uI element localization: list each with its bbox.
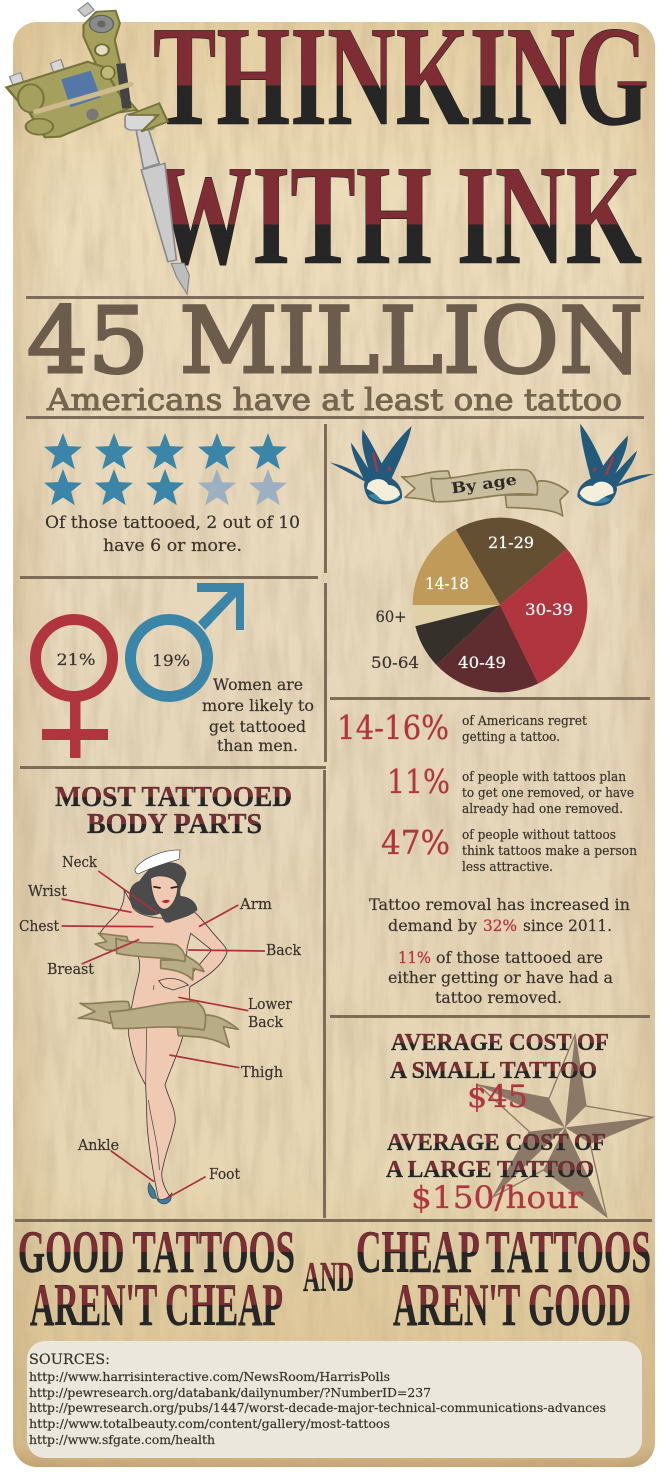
pie chart: tattooed by age: 50-64 — [371, 653, 419, 672]
panel: sources: http://www.harrisinteractive.com/NewsRoom/HarrisPolls — [29, 1370, 390, 1384]
stat: 47 percent: less attractive. — [462, 860, 553, 875]
stat: 47 percent: of people without tattoos — [462, 828, 616, 843]
heading: most tattooed body parts: BODY PARTS — [87, 808, 262, 840]
panel: most tattooed body parts — [19, 781, 301, 1204]
banner: by age: By age — [450, 470, 518, 498]
panel: sources: http://www.totalbeauty.com/content/gallery/most-tattoos — [29, 1417, 390, 1431]
panel: sources: http://pewresearch.org/pubs/1447/worst-decade-major-technical-communications-advances — [29, 1401, 606, 1415]
panel: regret statistics — [337, 708, 638, 1007]
body part labels: Back — [248, 1015, 283, 1031]
text: removal share: 11% — [398, 948, 431, 967]
top rule — [26, 296, 644, 299]
text: removal demand — [369, 895, 630, 935]
heading: small tattoo cost: AVERAGE COST OF — [391, 1030, 609, 1056]
male percent: 19% — [152, 651, 190, 670]
heading: small tattoo cost — [390, 1030, 609, 1084]
text: removal share — [388, 948, 613, 1007]
section rule — [26, 416, 644, 419]
pie chart: tattooed by age — [371, 518, 587, 692]
panel: tattoo cost — [386, 1030, 653, 1217]
stat: 47 percent: 47% — [381, 823, 450, 862]
stat: 14-16 percent: 14-16% — [337, 708, 449, 747]
pie chart: tattooed by age: 14-18 — [425, 574, 469, 593]
body part labels: Lower — [248, 997, 292, 1013]
gender caption: get tattooed — [209, 717, 306, 736]
body part labels: Back — [266, 943, 301, 959]
pie chart: tattooed by age: 40-49 — [458, 653, 506, 672]
female percent: 21% — [56, 650, 96, 669]
text: removal share: tattoo removed. — [435, 988, 562, 1007]
heading: large tattoo cost — [386, 1130, 606, 1183]
heading: large tattoo cost: A LARGE TATTOO — [386, 1157, 594, 1183]
text: removal share: either getting or have had a — [388, 968, 613, 987]
slogan: AREN'T CHEAP — [30, 1272, 283, 1338]
stat: 11 percent: of people with tattoos plan — [462, 770, 627, 785]
section dividers — [15, 424, 652, 1222]
body part labels: Arm — [239, 897, 272, 913]
icon: male symbol — [130, 583, 244, 696]
gender caption: Women are — [213, 675, 303, 694]
slogan: GOOD TATTOOS — [18, 1219, 295, 1285]
text: removal demand: since 2011. — [523, 916, 612, 935]
text: removal share: of those tattooed are — [436, 948, 603, 967]
panel: sources: SOURCES: — [29, 1352, 110, 1368]
gender caption: more likely to — [202, 696, 314, 715]
stat: 11 percent: 11% — [387, 762, 450, 801]
body part labels: Breast — [47, 962, 94, 978]
icon: right swallow — [567, 424, 661, 515]
panel: by age — [330, 424, 661, 692]
text: removal demand: Tattoo removal has increased in — [369, 895, 630, 914]
pie chart: tattooed by age: 60+ — [376, 607, 406, 626]
stars caption: Of those tattooed, 2 out of 10 — [45, 513, 300, 533]
gender caption: than men. — [217, 736, 298, 755]
banner: by age — [402, 470, 568, 516]
stat: 47 percent — [381, 823, 638, 875]
panel: sources: http://pewresearch.org/databank/dailynumber/?NumberID=237 — [29, 1386, 431, 1400]
icon: tattoo machine — [6, 3, 189, 294]
stat: 11 percent: to get one removed, or have — [462, 786, 634, 801]
body part labels: Thigh — [241, 1065, 283, 1081]
heading: most tattooed body parts — [55, 781, 292, 840]
panel: gender comparison — [36, 583, 314, 758]
heading: small tattoo cost: A SMALL TATTOO — [390, 1058, 597, 1084]
title — [153, 0, 649, 294]
panel: sources: http://www.sfgate.com/health — [29, 1433, 215, 1447]
body part labels: Ankle — [77, 1138, 119, 1154]
pie chart: tattooed by age: 30-39 — [525, 600, 573, 619]
subtitle: Americans have at least one tattoo — [46, 383, 622, 418]
heading: large tattoo cost: AVERAGE COST OF — [387, 1130, 606, 1156]
stars caption — [45, 513, 300, 556]
figure: sailor pin-up — [62, 850, 265, 1204]
text: removal demand: demand by — [388, 916, 477, 935]
gender caption — [202, 675, 314, 755]
body part labels: Foot — [209, 1167, 240, 1183]
stat: 47 percent: think tattoos make a person — [462, 844, 638, 859]
big number: 45 million: 45 MILLION — [27, 289, 643, 394]
body part labels — [19, 855, 301, 1183]
body part labels: Chest — [19, 919, 59, 935]
price: small tattoo: $45 — [467, 1079, 528, 1115]
stat: 14-16 percent: getting a tattoo. — [462, 730, 560, 745]
text: removal demand: 32% — [483, 916, 517, 935]
stars caption: have 6 or more. — [103, 536, 242, 556]
panel: sources — [27, 1341, 642, 1458]
panel: number of tattoos — [44, 433, 300, 556]
body part labels: Neck — [62, 855, 97, 871]
stat: 11 percent: already had one removed. — [462, 802, 623, 817]
icon: left swallow — [330, 426, 412, 504]
pie chart: tattooed by age: 21-29 — [488, 533, 534, 552]
heading: most tattooed body parts: MOST TATTOOED — [55, 781, 292, 813]
icon: nautical star — [478, 1035, 653, 1217]
icon: female symbol — [36, 620, 112, 758]
slogan — [18, 1219, 651, 1338]
price: large tattoo: $150/hour — [411, 1180, 583, 1216]
stat: 14-16 percent — [337, 708, 588, 747]
icon: ten stars — [44, 433, 287, 505]
stat: 14-16 percent: of Americans regret — [462, 714, 588, 729]
slogan: AND — [303, 1255, 354, 1301]
body part labels: Wrist — [28, 884, 67, 900]
stat: 11 percent — [387, 762, 634, 817]
